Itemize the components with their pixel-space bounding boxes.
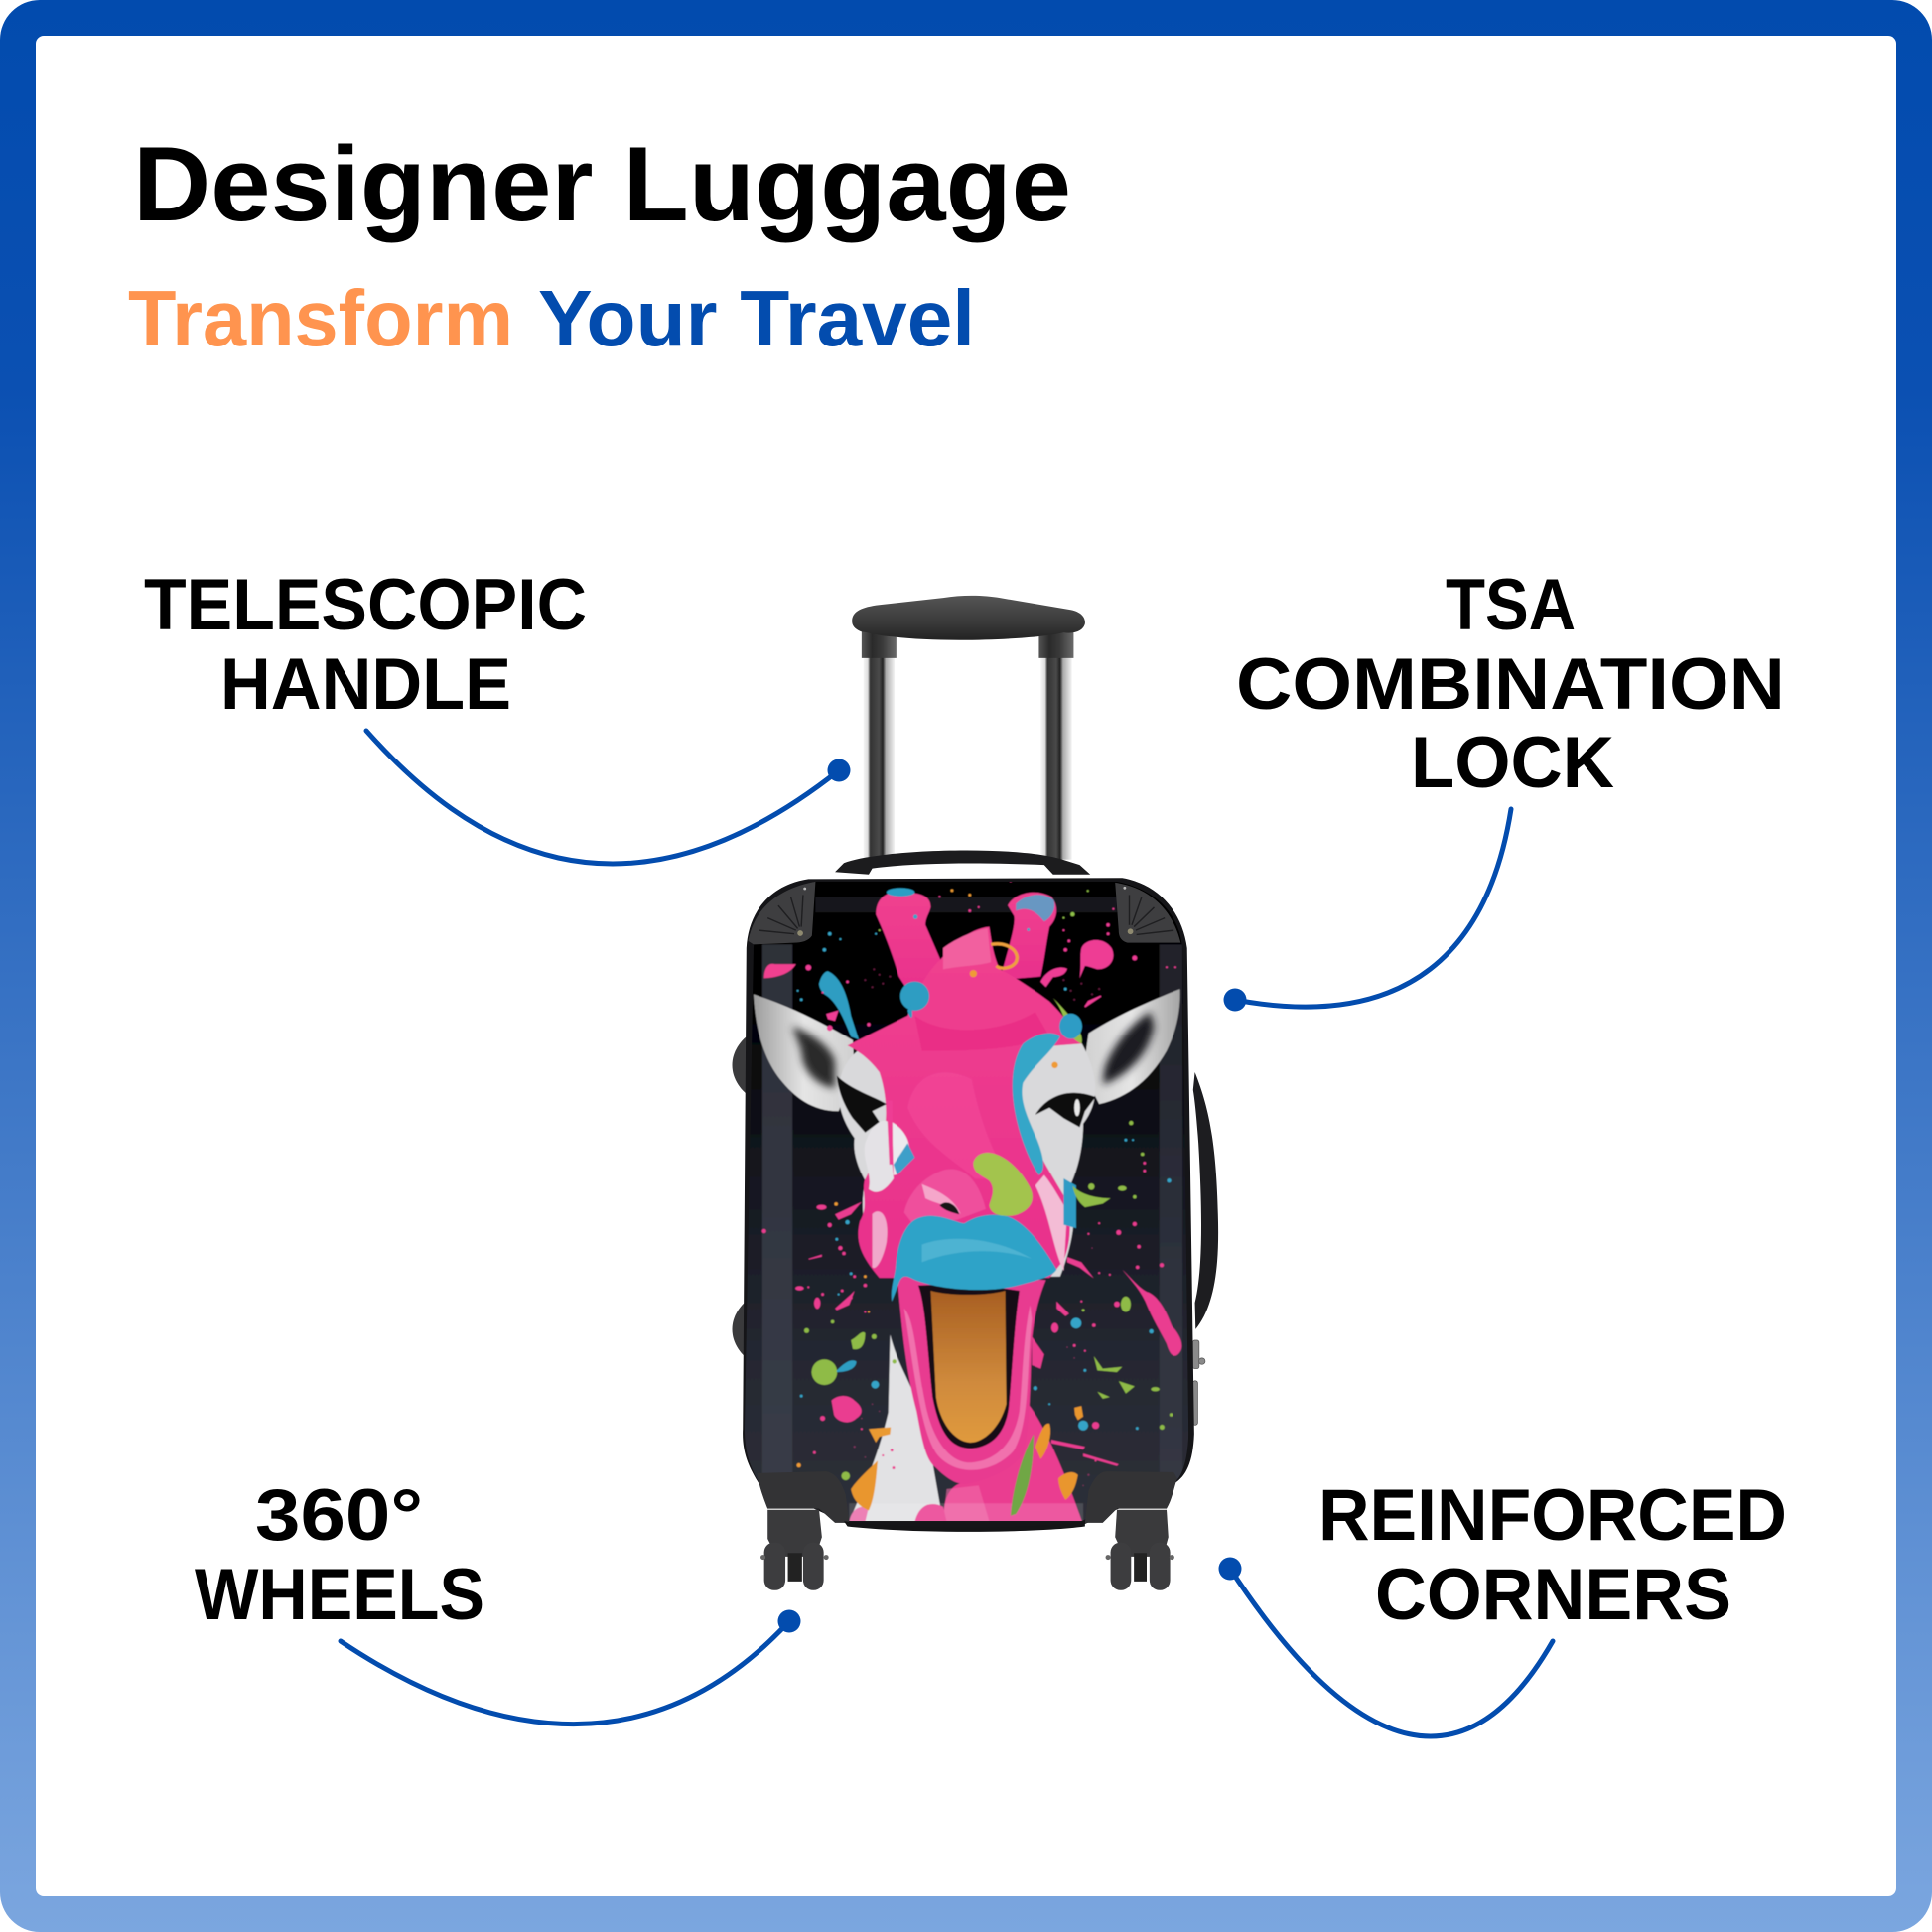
paint splatter dots <box>761 1162 1164 1486</box>
paint splashes left <box>808 1202 891 1510</box>
label: 360 wheels: 360° <box>255 1475 423 1556</box>
paint splashes right <box>1032 1257 1181 1466</box>
printed art panel <box>741 878 1198 1526</box>
green paint blob <box>973 1153 1033 1216</box>
horns <box>875 887 1058 987</box>
corner reinforcement bottom left <box>757 1471 849 1523</box>
label: TSA combination lock: LOCK <box>1411 723 1614 803</box>
handle grip <box>852 596 1085 640</box>
mouth interior <box>918 1284 1020 1449</box>
paint splatter top <box>805 880 1176 1031</box>
label: TSA combination lock: COMBINATION <box>1236 644 1785 725</box>
carry handle <box>835 850 1090 875</box>
lower fittings <box>757 1471 1177 1590</box>
shell reflection stripes <box>762 897 1182 1483</box>
side handle right <box>1193 1072 1218 1329</box>
subtitle <box>128 274 975 362</box>
mouth outer lip <box>897 1275 1046 1484</box>
bottom edge <box>844 1521 1085 1532</box>
title: Designer Luggage <box>133 124 1071 243</box>
label: reinforced corners: CORNERS <box>1375 1555 1731 1635</box>
suitcase illustration <box>732 596 1218 1590</box>
nostril and nose <box>904 1170 986 1227</box>
suitcase shell <box>743 878 1194 1531</box>
label: telescopic handle: TELESCOPIC <box>144 565 587 645</box>
label: telescopic handle <box>144 565 587 725</box>
white neck <box>849 1334 943 1523</box>
arrow: reinforced corners <box>1219 1557 1553 1736</box>
corner reinforcement top right <box>1115 883 1180 943</box>
inner lip highlight <box>904 1305 1032 1470</box>
subtitle: Transform <box>128 274 513 362</box>
subtitle: Your Travel <box>538 274 975 362</box>
label: 360 wheels: WHEELS <box>195 1555 484 1635</box>
wheels left <box>760 1510 829 1590</box>
label: telescopic handle: HANDLE <box>220 644 511 725</box>
tongue <box>930 1291 1007 1443</box>
arrow: wheels <box>341 1610 800 1725</box>
zipper <box>1192 1340 1205 1425</box>
blue and white paint streaks <box>865 998 1082 1271</box>
blue ball and top splashes <box>764 940 1113 1039</box>
head base white <box>838 1036 1095 1278</box>
blue muzzle <box>892 1215 1056 1302</box>
label: 360 wheels <box>195 1475 484 1635</box>
label: TSA combination lock: TSA <box>1446 565 1576 645</box>
pink patches at neck base <box>849 1404 1083 1522</box>
wheels right <box>1106 1510 1174 1590</box>
eyes <box>837 1076 1096 1133</box>
label: TSA combination lock <box>1236 565 1785 803</box>
telescopic poles <box>862 629 1073 860</box>
corner reinforcement top left <box>749 882 815 944</box>
arrow: telescopic handle <box>366 731 850 864</box>
side bumpers <box>732 1032 754 1363</box>
pink crown and face paint <box>848 927 1081 1278</box>
ears <box>754 989 1180 1111</box>
paint splashes bottom right <box>1011 1406 1083 1516</box>
lower artwork <box>761 1121 1181 1522</box>
label: reinforced corners: REINFORCED <box>1318 1475 1787 1556</box>
corner reinforcement bottom right <box>1085 1471 1177 1523</box>
label: reinforced corners <box>1318 1475 1787 1635</box>
arrow: TSA lock <box>1223 809 1511 1011</box>
